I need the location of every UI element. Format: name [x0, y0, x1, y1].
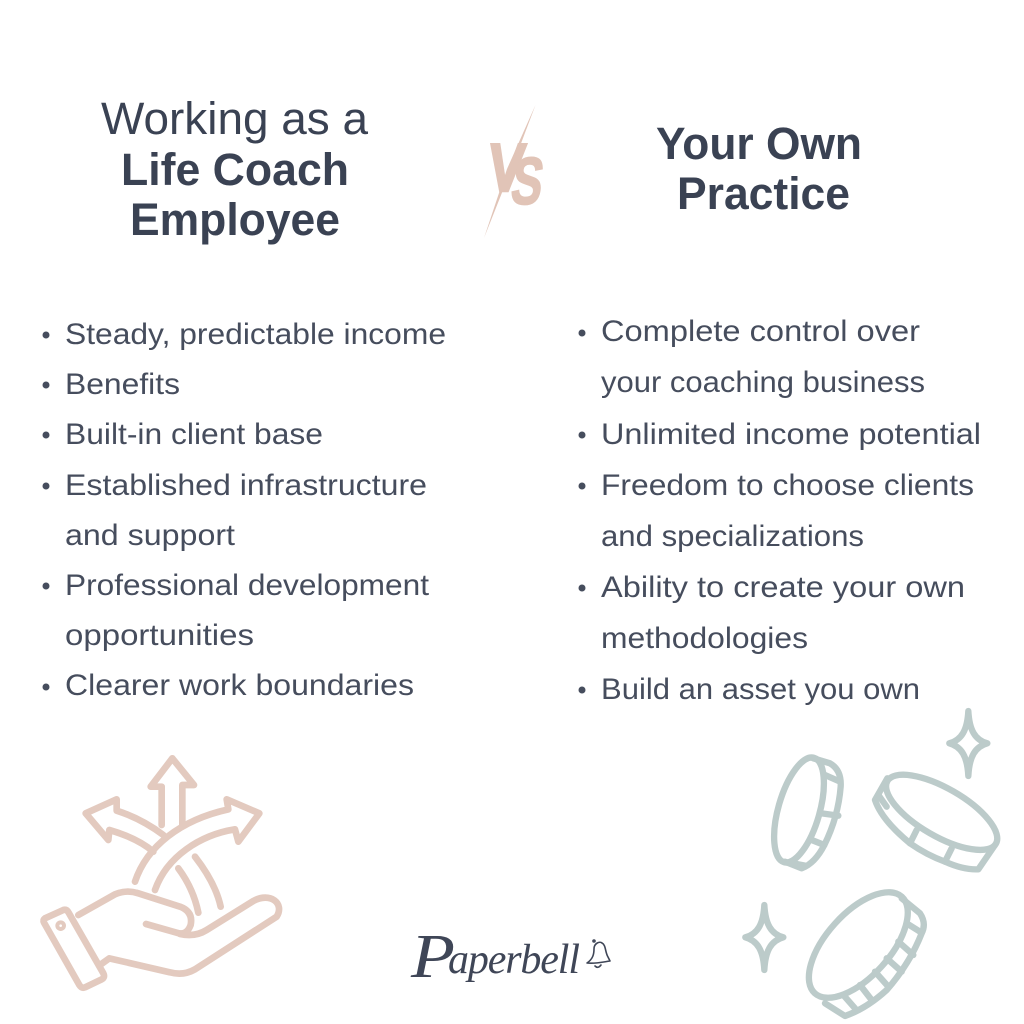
list: employee benefits	[42, 318, 446, 702]
heading: your own practice: Your Own	[656, 118, 862, 169]
list: own practice benefits: methodologies	[601, 622, 808, 655]
versus badge	[484, 105, 548, 238]
heading: your own practice: Practice	[677, 168, 850, 219]
list: employee benefits: Professional development	[65, 569, 430, 602]
coin: lower centre	[791, 876, 925, 1016]
heading: working as a life coach employee: Employee	[130, 194, 340, 245]
heading: working as a life coach employee	[101, 93, 369, 245]
list: employee benefits: Clearer work boundaries	[65, 669, 414, 702]
heading: your own practice	[656, 118, 862, 219]
list: own practice benefits: Complete control over	[601, 315, 920, 348]
logo: paperbell wordmark with bell: P	[410, 923, 455, 991]
icon: coins and sparkles	[745, 711, 1008, 1016]
logo: paperbell wordmark with bell: aperbell	[448, 937, 580, 983]
versus badge: V	[484, 130, 528, 206]
list: own practice benefits: Freedom to choose clients	[601, 469, 974, 502]
coin: upper left	[764, 752, 841, 868]
coin: upper right	[875, 760, 1008, 869]
logo: paperbell wordmark with bell	[410, 923, 610, 991]
list: employee benefits: and support	[65, 519, 236, 552]
list: own practice benefits	[578, 315, 981, 706]
list: own practice benefits: and specializations	[601, 520, 864, 553]
list: employee benefits: opportunities	[65, 619, 254, 652]
list: employee benefits: Established infrastructure	[65, 469, 427, 502]
heading: working as a life coach employee: Working as a	[101, 93, 369, 144]
versus badge: S	[507, 144, 548, 219]
sparkle: lower left	[745, 905, 783, 970]
icon: bell	[587, 940, 610, 967]
list: employee benefits: Steady, predictable income	[65, 318, 446, 351]
list: own practice benefits: Ability to create your own	[601, 571, 965, 604]
list: employee benefits: Benefits	[65, 368, 180, 401]
list: own practice benefits: your coaching business	[601, 366, 925, 399]
heading: working as a life coach employee: Life Coach	[121, 144, 349, 195]
sparkle: top right	[949, 711, 987, 776]
list: employee benefits: Built-in client base	[65, 418, 323, 451]
icon: hand with diverging arrows	[44, 758, 279, 988]
list: own practice benefits: Build an asset you own	[601, 673, 920, 706]
list: own practice benefits: Unlimited income potential	[601, 418, 981, 451]
